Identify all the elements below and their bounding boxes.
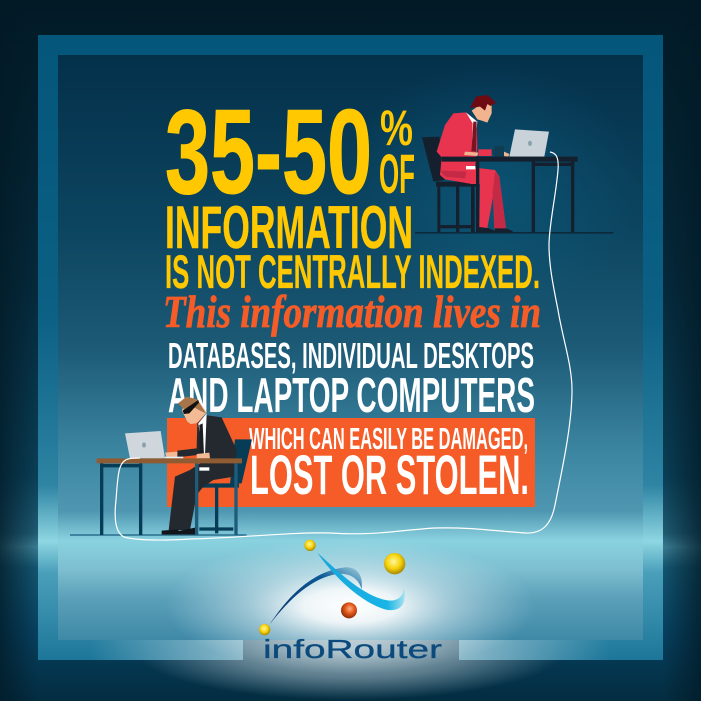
left plate beside logo bbox=[90, 640, 243, 660]
headline: percent: % bbox=[380, 100, 413, 156]
logo ball: large yellow bbox=[384, 553, 405, 574]
cable bbox=[115, 152, 572, 540]
illustration: man in black suit at desk bbox=[70, 397, 252, 536]
logo swoosh: dark blue bbox=[270, 567, 362, 624]
infographic canvas: OF bbox=[379, 142, 415, 205]
logo ball: orange bbox=[341, 602, 357, 618]
headline: 35-50: 35-50 bbox=[165, 85, 372, 219]
logo: infoRouter bbox=[259, 540, 405, 635]
logo ball: top yellow bbox=[304, 540, 316, 551]
logo swoosh: cyan bbox=[317, 553, 405, 610]
logo white glow bbox=[165, 536, 535, 676]
script line: This information lives in bbox=[163, 286, 541, 337]
orange callout box bbox=[167, 418, 535, 507]
illustration: man in red suit at desk bbox=[415, 95, 613, 234]
bottom glow bbox=[135, 600, 565, 701]
frame band bbox=[38, 35, 663, 660]
background: inner panel bbox=[58, 55, 643, 640]
logo wordmark: infoRouter bbox=[263, 634, 442, 664]
headline: INFORMATION: INFORMATION bbox=[165, 194, 413, 261]
left vignette bbox=[0, 0, 38, 701]
right plate beside logo bbox=[459, 640, 610, 660]
logo ball: lower yellow bbox=[259, 624, 270, 635]
right vignette bbox=[663, 0, 701, 701]
inner panel glow bbox=[58, 55, 643, 455]
